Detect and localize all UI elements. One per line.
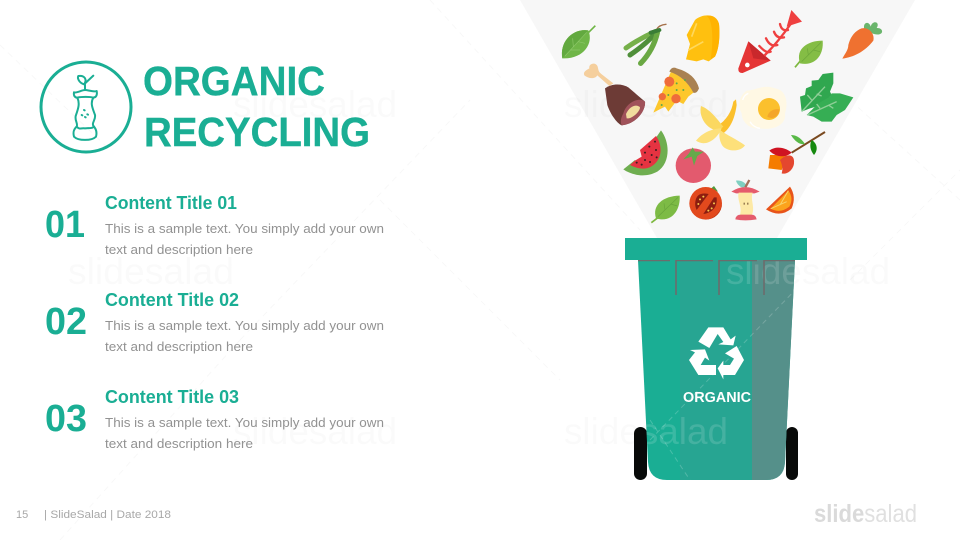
- item 01: This is a sample text. You simply add your own: [105, 221, 384, 236]
- icon: tomato slice: [689, 186, 722, 220]
- icon: tomato: [676, 147, 711, 183]
- icon: apple core: [731, 180, 760, 220]
- item 03: This is a sample text. You simply add your own: [105, 415, 384, 430]
- icon: carrot: [842, 22, 882, 59]
- item 01: Content Title 01: [105, 193, 237, 213]
- item 01: [45, 193, 384, 257]
- icon: spinach leaf: [562, 26, 595, 58]
- icon: apple core in circle: [41, 62, 131, 152]
- bin body: [638, 260, 795, 480]
- icon: pizza slice: [653, 68, 699, 113]
- item 03: 03: [45, 398, 87, 440]
- icon: green leaf bottom: [651, 196, 680, 223]
- icon: orange slice: [766, 187, 794, 214]
- item 02: This is a sample text. You simply add your own: [105, 318, 384, 333]
- watermarks: slidesalad: [68, 251, 234, 292]
- recycling bin: [625, 238, 807, 480]
- icon: banana: [696, 99, 745, 150]
- watermarks: slidesalad: [233, 84, 397, 125]
- item 03: Content Title 03: [105, 387, 239, 407]
- item 01: 01: [45, 204, 85, 246]
- item 02: [45, 290, 384, 354]
- item 02: Content Title 02: [105, 290, 239, 310]
- bin handles: [638, 260, 795, 295]
- icon: green leaf right: [795, 41, 823, 67]
- item 02: 02: [45, 301, 87, 343]
- icon: rose flower: [768, 132, 825, 174]
- item 03: text and description here: [105, 436, 253, 451]
- bin label: ORGANIC: [683, 390, 752, 406]
- funnel light beam: [520, 0, 915, 238]
- food icons: [562, 10, 882, 223]
- watermarks: slidesalad: [564, 84, 728, 125]
- icon: recycle symbol: [689, 327, 744, 379]
- recycling bin: slidesalad: [726, 251, 890, 292]
- icon: watermelon slice: [623, 130, 668, 175]
- logo: slidesalad: slidesalad: [814, 500, 917, 528]
- icon: fish skeleton: [738, 10, 802, 73]
- watermarks: slidesalad: [726, 251, 890, 292]
- icon: kale greens: [800, 73, 853, 122]
- watermarks: slidesalad: [233, 411, 397, 452]
- footer: | SlideSalad | Date 2018: [44, 509, 171, 521]
- item 01: text and description here: [105, 242, 253, 257]
- item 02: text and description here: [105, 339, 253, 354]
- bin lid: [625, 238, 807, 260]
- icon: fried egg: [739, 87, 787, 129]
- icon: cheese chunk: [686, 15, 719, 61]
- icon: meat drumstick: [584, 64, 645, 125]
- watermarks: slidesalad: [564, 411, 728, 452]
- title: RECYCLING: [144, 109, 370, 155]
- recycling bin: slidesalad: [564, 411, 728, 452]
- bin wheels: [634, 427, 798, 480]
- item 03: [45, 387, 384, 451]
- title: [143, 58, 370, 155]
- footer: 15: [16, 509, 28, 521]
- watermarks: [68, 84, 890, 452]
- icon: green beans: [626, 24, 666, 63]
- title: ORGANIC: [143, 58, 325, 104]
